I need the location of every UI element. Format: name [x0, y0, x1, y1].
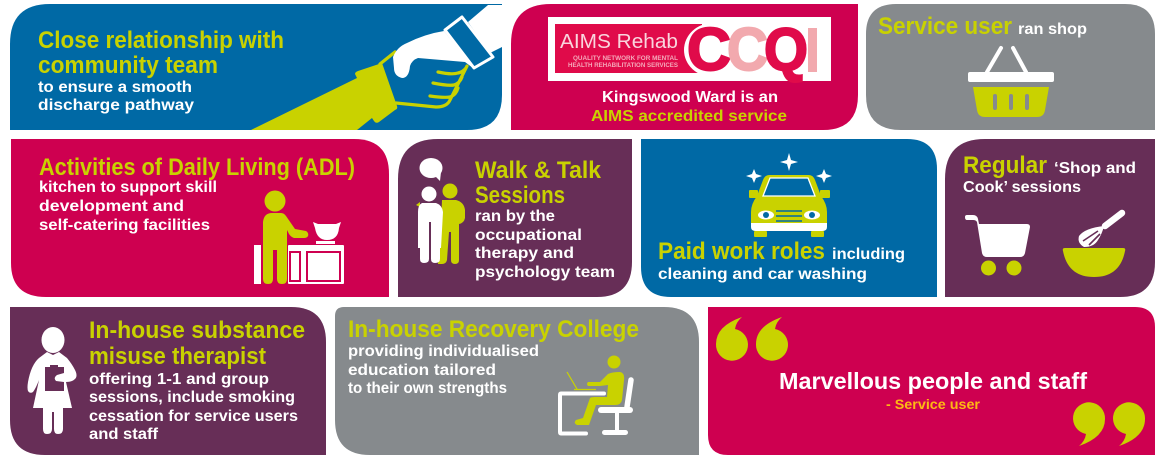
- text: occupational therapy: [475, 208, 615, 281]
- heading: substance misuse: In-house substance: [89, 317, 305, 344]
- heading: regular: Regular: [963, 152, 1047, 179]
- text: kitchen: self-catering facilities: [39, 217, 210, 234]
- heading: walk and talk: Walk & Talk: [475, 157, 602, 184]
- heading: paid work roles: Paid work roles: [658, 238, 825, 265]
- heading: service user: Service user: [878, 13, 1012, 40]
- text: group sessions: and staff: [89, 426, 159, 443]
- panel: service user shop: [866, 4, 1155, 130]
- text: individualised education: to their own strengths: [348, 380, 507, 397]
- text: kitchen: development and: [39, 198, 184, 215]
- text: kitchen: [39, 179, 217, 234]
- text: group sessions: cessation for service users: [89, 408, 298, 425]
- panel: quote: [708, 307, 1155, 455]
- text: shop and cook: ‘Shop and: [1054, 160, 1136, 177]
- panel: activities of daily living: [11, 139, 389, 297]
- logo: AIMS Rehab CCQI: HEALTH REHABILITATION SERVICES: [568, 63, 678, 69]
- icon: clean car: [746, 153, 832, 237]
- text: discharge pathway: [38, 79, 194, 114]
- text: kitchen: kitchen to support skill: [39, 179, 217, 196]
- icon: handshake: [251, 5, 502, 130]
- text: shop and cook: Cook’ sessions: [963, 179, 1081, 196]
- icon: basket: [968, 48, 1054, 117]
- text: cleaning: cleaning and car washing: [658, 266, 867, 283]
- heading: close relationship: Close relationship with: [38, 27, 284, 54]
- heading: ADL: Activities of Daily Living (ADL): [39, 154, 355, 181]
- text: discharge pathway: discharge pathway: [38, 97, 194, 114]
- logo: AIMS Rehab CCQI: QUALITY NETWORK FOR MENTAL: [573, 56, 678, 62]
- text: discharge pathway: to ensure a smooth: [38, 79, 192, 96]
- text: individualised education: education tailored: [348, 362, 496, 379]
- logo: AIMS Rehab CCQI: C: [687, 16, 731, 83]
- text: occupational therapy: psychology team: [475, 264, 615, 281]
- panel: walk and talk: [398, 139, 632, 297]
- text: Kingswood Ward: Kingswood Ward is an: [602, 89, 778, 106]
- text: including: including: [832, 246, 905, 263]
- panel: recovery college: [335, 307, 699, 455]
- heading: substance misuse: [89, 317, 305, 370]
- logo: AIMS Rehab CCQI: AIMS Rehab: [560, 30, 678, 53]
- text: shop and cook: [963, 160, 1136, 196]
- text: individualised education: [348, 343, 539, 397]
- icon: person cooking: [254, 190, 344, 284]
- logo: AIMS Rehab CCQI: [548, 16, 831, 83]
- icon: person at desk: [560, 356, 633, 435]
- text: group sessions: offering 1-1 and group: [89, 371, 269, 388]
- text: individualised education: providing individualised: [348, 343, 539, 360]
- panel: shop and cook: [945, 139, 1155, 297]
- text: ran shop: ran shop: [1018, 21, 1087, 38]
- heading: walk and talk: Sessions: [475, 182, 565, 209]
- logo: AIMS Rehab CCQI: Q: [764, 16, 808, 83]
- text: group sessions: [89, 371, 298, 443]
- text: attribution: - Service user: [886, 396, 981, 412]
- icon: opening quote: [716, 317, 788, 361]
- text: quote: Marvellous people and staff: [779, 368, 1087, 394]
- text: occupational therapy: therapy and: [475, 245, 574, 262]
- heading: walk and talk: [475, 157, 602, 209]
- panel: AIMS accreditation: [511, 4, 858, 130]
- icon: two people talking: [416, 158, 465, 264]
- icon: shopping trolley: [965, 215, 1030, 276]
- panel: substance misuse therapist: [10, 307, 326, 455]
- panel: paid work roles: [641, 139, 937, 297]
- text: occupational therapy: occupational: [475, 227, 582, 244]
- logo: AIMS Rehab CCQI: C: [727, 16, 768, 83]
- text: AIMS accredited: AIMS accredited service: [591, 108, 787, 125]
- text: group sessions: sessions, include smoking: [89, 389, 295, 406]
- heading: recovery college: In-house Recovery College: [348, 316, 639, 343]
- panel: community team: [10, 4, 502, 130]
- icon: closing quote: [1073, 402, 1145, 446]
- icon: therapist with clipboard: [28, 327, 76, 434]
- text: occupational therapy: ran by the: [475, 208, 555, 225]
- heading: substance misuse: misuse therapist: [89, 343, 266, 370]
- icon: whisk and bowl: [1063, 213, 1125, 277]
- heading line: community team: community team: [38, 52, 218, 79]
